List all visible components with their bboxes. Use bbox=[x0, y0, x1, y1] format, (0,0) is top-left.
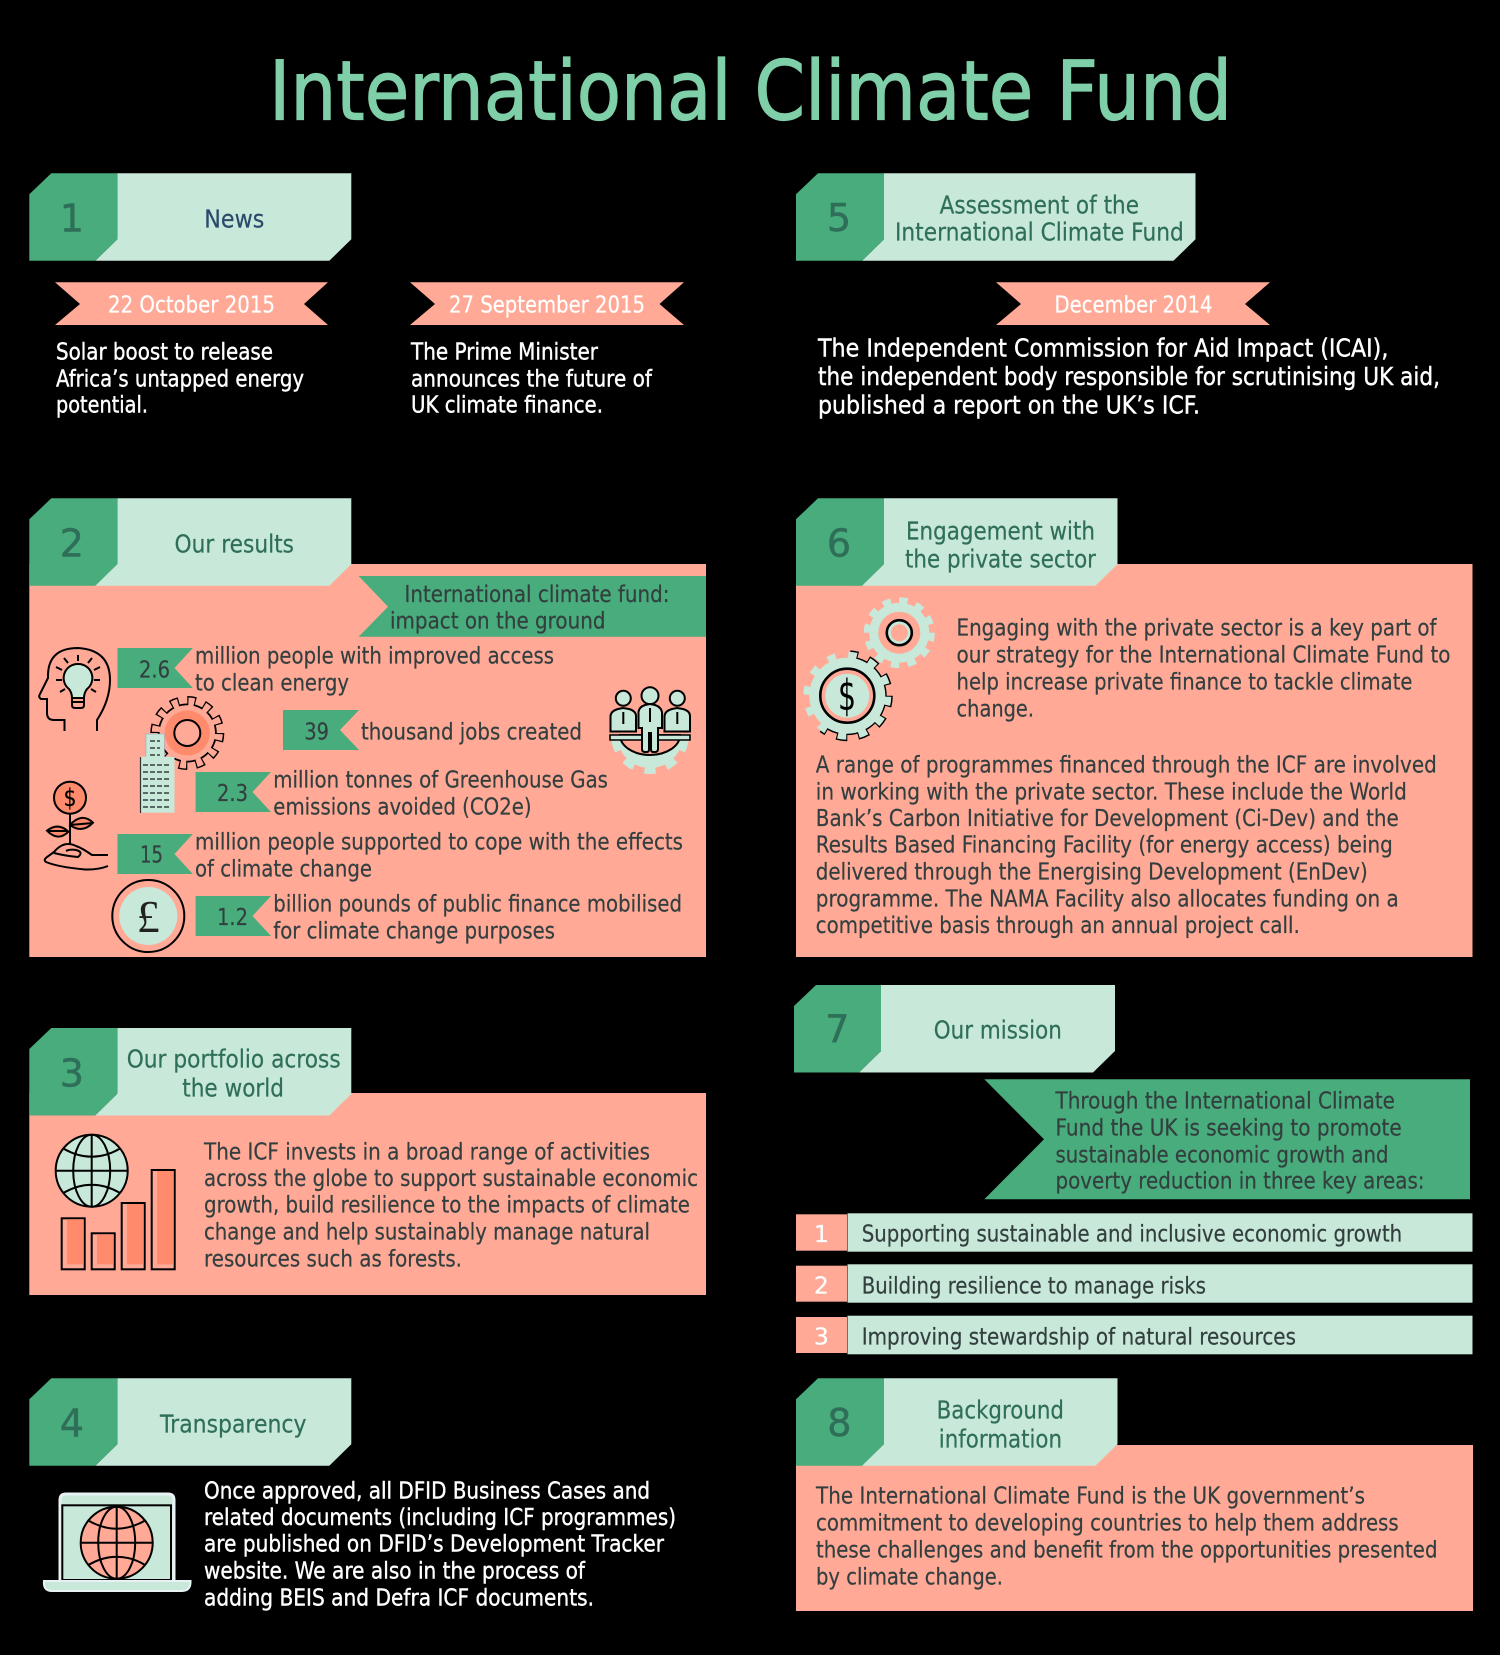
icon: money plant in hand bbox=[45, 782, 108, 870]
heading: 2 Our results: Our results bbox=[174, 530, 294, 559]
icon: money plant in hand: $ bbox=[64, 784, 76, 812]
date ribbon: 22 October 2015 bbox=[55, 282, 328, 325]
heading: 4 Transparency: 4 bbox=[60, 1402, 84, 1446]
text: engaging with private sector bbox=[956, 616, 1450, 723]
text: DFID business cases: adding BEIS and Defra ICF documents. bbox=[204, 1586, 594, 1612]
text: solar boost: Solar boost to release bbox=[56, 339, 273, 365]
icon: gear with building bbox=[140, 702, 219, 813]
heading: 1 News: News bbox=[204, 204, 264, 233]
stat: 2.6 million people: million people with improved access bbox=[195, 643, 554, 669]
text: engaging with private sector: change. bbox=[956, 697, 1034, 723]
stat: 15 million people: 15 bbox=[140, 843, 163, 869]
text: ICF invests: change and help sustainably manage natural bbox=[204, 1219, 650, 1245]
text: ICAI report bbox=[817, 334, 1440, 419]
panel: section 8 background information bbox=[796, 1378, 1473, 1611]
ribbon: mission statement: Through the International Climate bbox=[1055, 1088, 1395, 1114]
text: about the fund: commitment to developing countries to help them address bbox=[816, 1511, 1399, 1537]
text: DFID business cases: Once approved, all DFID Business Cases and bbox=[204, 1478, 650, 1504]
text: DFID business cases: website. We are also in the process of bbox=[204, 1558, 586, 1584]
panel: section 6 private sector bbox=[796, 498, 1472, 957]
list item 2 bbox=[796, 1264, 1472, 1303]
list item 1 bbox=[796, 1213, 1472, 1252]
heading: 6 Engagement with the private sector: Engagement with bbox=[906, 516, 1095, 545]
heading: 5 Assessment of the International Climate Fund: 5 bbox=[827, 196, 851, 240]
ribbon: mission statement: poverty reduction in three key areas: bbox=[1056, 1168, 1424, 1194]
list item 3 bbox=[796, 1316, 1472, 1354]
list item 3: 3 bbox=[814, 1322, 829, 1350]
text: engaging with private sector: help increase private finance to tackle climate bbox=[956, 669, 1412, 695]
heading: 3 Our portfolio across the world: the world bbox=[182, 1074, 284, 1103]
heading: 8 Background information: information bbox=[939, 1424, 1062, 1453]
stat: 15 million people: million people supported to cope with the effects bbox=[195, 829, 683, 855]
heading: 5 Assessment of the International Climate Fund: International Climate Fund bbox=[895, 218, 1184, 247]
heading: 6 Engagement with the private sector bbox=[796, 498, 1118, 586]
stat: 2.6 million people: to clean energy bbox=[195, 671, 349, 697]
text: about the fund: by climate change. bbox=[816, 1564, 1003, 1590]
heading: 4 Transparency: Transparency bbox=[159, 1410, 307, 1439]
text: ICF invests: resources such as forests. bbox=[204, 1247, 462, 1273]
text: about the fund: The International Climate Fund is the UK government’s bbox=[815, 1483, 1365, 1509]
heading: 8 Background information: Background bbox=[937, 1395, 1064, 1424]
heading: 1 News bbox=[29, 173, 351, 261]
stat: 15 million people: of climate change bbox=[195, 857, 372, 883]
heading: 2 Our results: 2 bbox=[60, 521, 84, 565]
text: ICF invests: The ICF invests in a broad range of activities bbox=[203, 1139, 650, 1165]
panel: section 4 transparency bbox=[29, 1378, 676, 1612]
stat: 1.2 billion pounds: 1.2 bbox=[217, 905, 248, 931]
text: engaging with private sector: Engaging with the private sector is a key part of bbox=[956, 616, 1437, 642]
heading: 8 Background information: 8 bbox=[827, 1401, 851, 1445]
date ribbon: 27 September 2015: 27 September 2015 bbox=[449, 291, 645, 319]
stat: 39 thousand jobs: thousand jobs created bbox=[361, 719, 582, 745]
panel: section 3 portfolio bbox=[29, 1028, 706, 1295]
heading: 2 Our results bbox=[29, 498, 351, 586]
text: ICAI report: The Independent Commission for Aid Impact (ICAI), bbox=[817, 334, 1388, 363]
icon: laptop with globe bbox=[44, 1494, 191, 1591]
text: solar boost bbox=[56, 339, 304, 419]
heading: 8 Background information bbox=[796, 1378, 1118, 1466]
stat: 2.3 million tonnes bbox=[196, 767, 608, 820]
heading: 4 Transparency bbox=[29, 1378, 351, 1466]
stat: 1.2 billion pounds bbox=[196, 892, 682, 944]
stat: 2.6 million people bbox=[118, 643, 554, 697]
date ribbon: December 2014: December 2014 bbox=[1054, 290, 1212, 318]
panel: section 2 our results bbox=[29, 498, 706, 957]
stat: 2.3 million tonnes: 2.3 bbox=[217, 781, 248, 807]
icon: pound coin: £ bbox=[137, 891, 160, 942]
text: range of programmes: delivered through the Energising Development (EnDev) bbox=[816, 860, 1368, 886]
ribbon: impact on the ground: impact on the ground bbox=[390, 608, 606, 634]
list item 1: 1 bbox=[814, 1220, 829, 1248]
ribbon: mission statement bbox=[984, 1079, 1470, 1199]
stat: 39 thousand jobs: 39 bbox=[304, 719, 329, 745]
date ribbon: 22 October 2015: 22 October 2015 bbox=[108, 291, 275, 319]
text: prime minister: announces the future of bbox=[411, 367, 653, 393]
stat: 2.6 million people: 2.6 bbox=[139, 657, 170, 683]
stat: 15 million people bbox=[118, 829, 683, 883]
panel: section 1 news bbox=[29, 173, 684, 419]
ribbon: impact on the ground: International climate fund: bbox=[404, 582, 670, 608]
date ribbon: December 2014 bbox=[996, 282, 1270, 325]
stat: 2.3 million tonnes: emissions avoided (CO2e) bbox=[273, 794, 532, 820]
panel background bbox=[29, 1093, 706, 1295]
text: range of programmes: competitive basis through an annual project call. bbox=[816, 913, 1300, 939]
text: solar boost: Africa’s untapped energy bbox=[56, 367, 304, 393]
text: DFID business cases bbox=[204, 1478, 676, 1612]
heading: 3 Our portfolio across the world: Our portfolio across bbox=[127, 1044, 341, 1073]
ribbon: impact on the ground bbox=[359, 576, 706, 637]
text: range of programmes: programme. The NAMA Facility also allocates funding on a bbox=[816, 886, 1399, 912]
icon: globe and bars bbox=[56, 1135, 175, 1269]
icon: gears with dollar: $ bbox=[838, 671, 856, 721]
list item 1: Supporting sustainable and inclusive economic growth bbox=[862, 1222, 1402, 1248]
stat: 39 thousand jobs bbox=[283, 710, 582, 750]
text: range of programmes bbox=[816, 753, 1437, 939]
heading: 5 Assessment of the International Climate Fund bbox=[796, 173, 1196, 261]
heading: 3 Our portfolio across the world: 3 bbox=[60, 1052, 84, 1096]
panel: section 7 our mission bbox=[794, 985, 1472, 1354]
icon: people on gear bbox=[610, 687, 690, 770]
text: DFID business cases: related documents (including ICF programmes) bbox=[204, 1505, 676, 1531]
list item 3: Improving stewardship of natural resources bbox=[862, 1324, 1296, 1350]
text: solar boost: potential. bbox=[56, 393, 148, 419]
icon: head with light bulb bbox=[39, 648, 110, 731]
text: ICF invests: across the globe to support sustainable economic bbox=[204, 1166, 698, 1192]
stat: 1.2 billion pounds: for climate change purposes bbox=[273, 918, 555, 944]
panel background bbox=[796, 564, 1472, 957]
heading: 6 Engagement with the private sector: 6 bbox=[827, 521, 851, 565]
text: ICAI report: published a report on the UK’s ICF. bbox=[818, 390, 1200, 419]
stat: 2.3 million tonnes: million tonnes of Greenhouse Gas bbox=[273, 767, 608, 793]
heading: 7 Our mission bbox=[794, 985, 1115, 1072]
text: prime minister: UK climate finance. bbox=[411, 393, 603, 419]
heading: 7 Our mission: Our mission bbox=[934, 1015, 1062, 1044]
text: range of programmes: in working with the private sector. These include the World bbox=[816, 779, 1407, 805]
heading: 7 Our mission: 7 bbox=[825, 1007, 849, 1051]
ribbon: mission statement: Fund the UK is seeking to promote bbox=[1056, 1116, 1402, 1142]
heading: 6 Engagement with the private sector: the private sector bbox=[905, 544, 1097, 573]
text: range of programmes: Bank’s Carbon Initiative for Development (Ci-Dev) and the bbox=[816, 806, 1399, 832]
stat: 1.2 billion pounds: billion pounds of public finance mobilised bbox=[273, 892, 682, 918]
icon: gears with dollar bbox=[806, 600, 932, 737]
heading: 3 Our portfolio across the world bbox=[29, 1028, 351, 1116]
icon: pound coin bbox=[112, 880, 184, 952]
date ribbon: 27 September 2015 bbox=[410, 282, 684, 325]
text: about the fund bbox=[815, 1483, 1438, 1590]
text: prime minister bbox=[410, 339, 653, 419]
text: prime minister: The Prime Minister bbox=[410, 339, 598, 365]
text: ICF invests: growth, build resilience to the impacts of climate bbox=[204, 1193, 690, 1219]
title: International Climate Fund bbox=[269, 44, 1232, 139]
text: ICF invests bbox=[203, 1139, 698, 1273]
panel: section 5 assessment bbox=[796, 173, 1440, 419]
ribbon: mission statement: sustainable economic growth and bbox=[1056, 1143, 1388, 1169]
text: range of programmes: Results Based Financing Facility (for energy access) being bbox=[816, 833, 1393, 859]
panel background bbox=[29, 564, 706, 957]
list item 2: Building resilience to manage risks bbox=[862, 1273, 1206, 1299]
list item 2: 2 bbox=[814, 1272, 829, 1300]
heading: 5 Assessment of the International Climate Fund: Assessment of the bbox=[940, 190, 1139, 219]
heading: 1 News: 1 bbox=[60, 196, 84, 240]
panel background bbox=[796, 1445, 1473, 1611]
text: DFID business cases: are published on DFID’s Development Tracker bbox=[204, 1532, 664, 1558]
